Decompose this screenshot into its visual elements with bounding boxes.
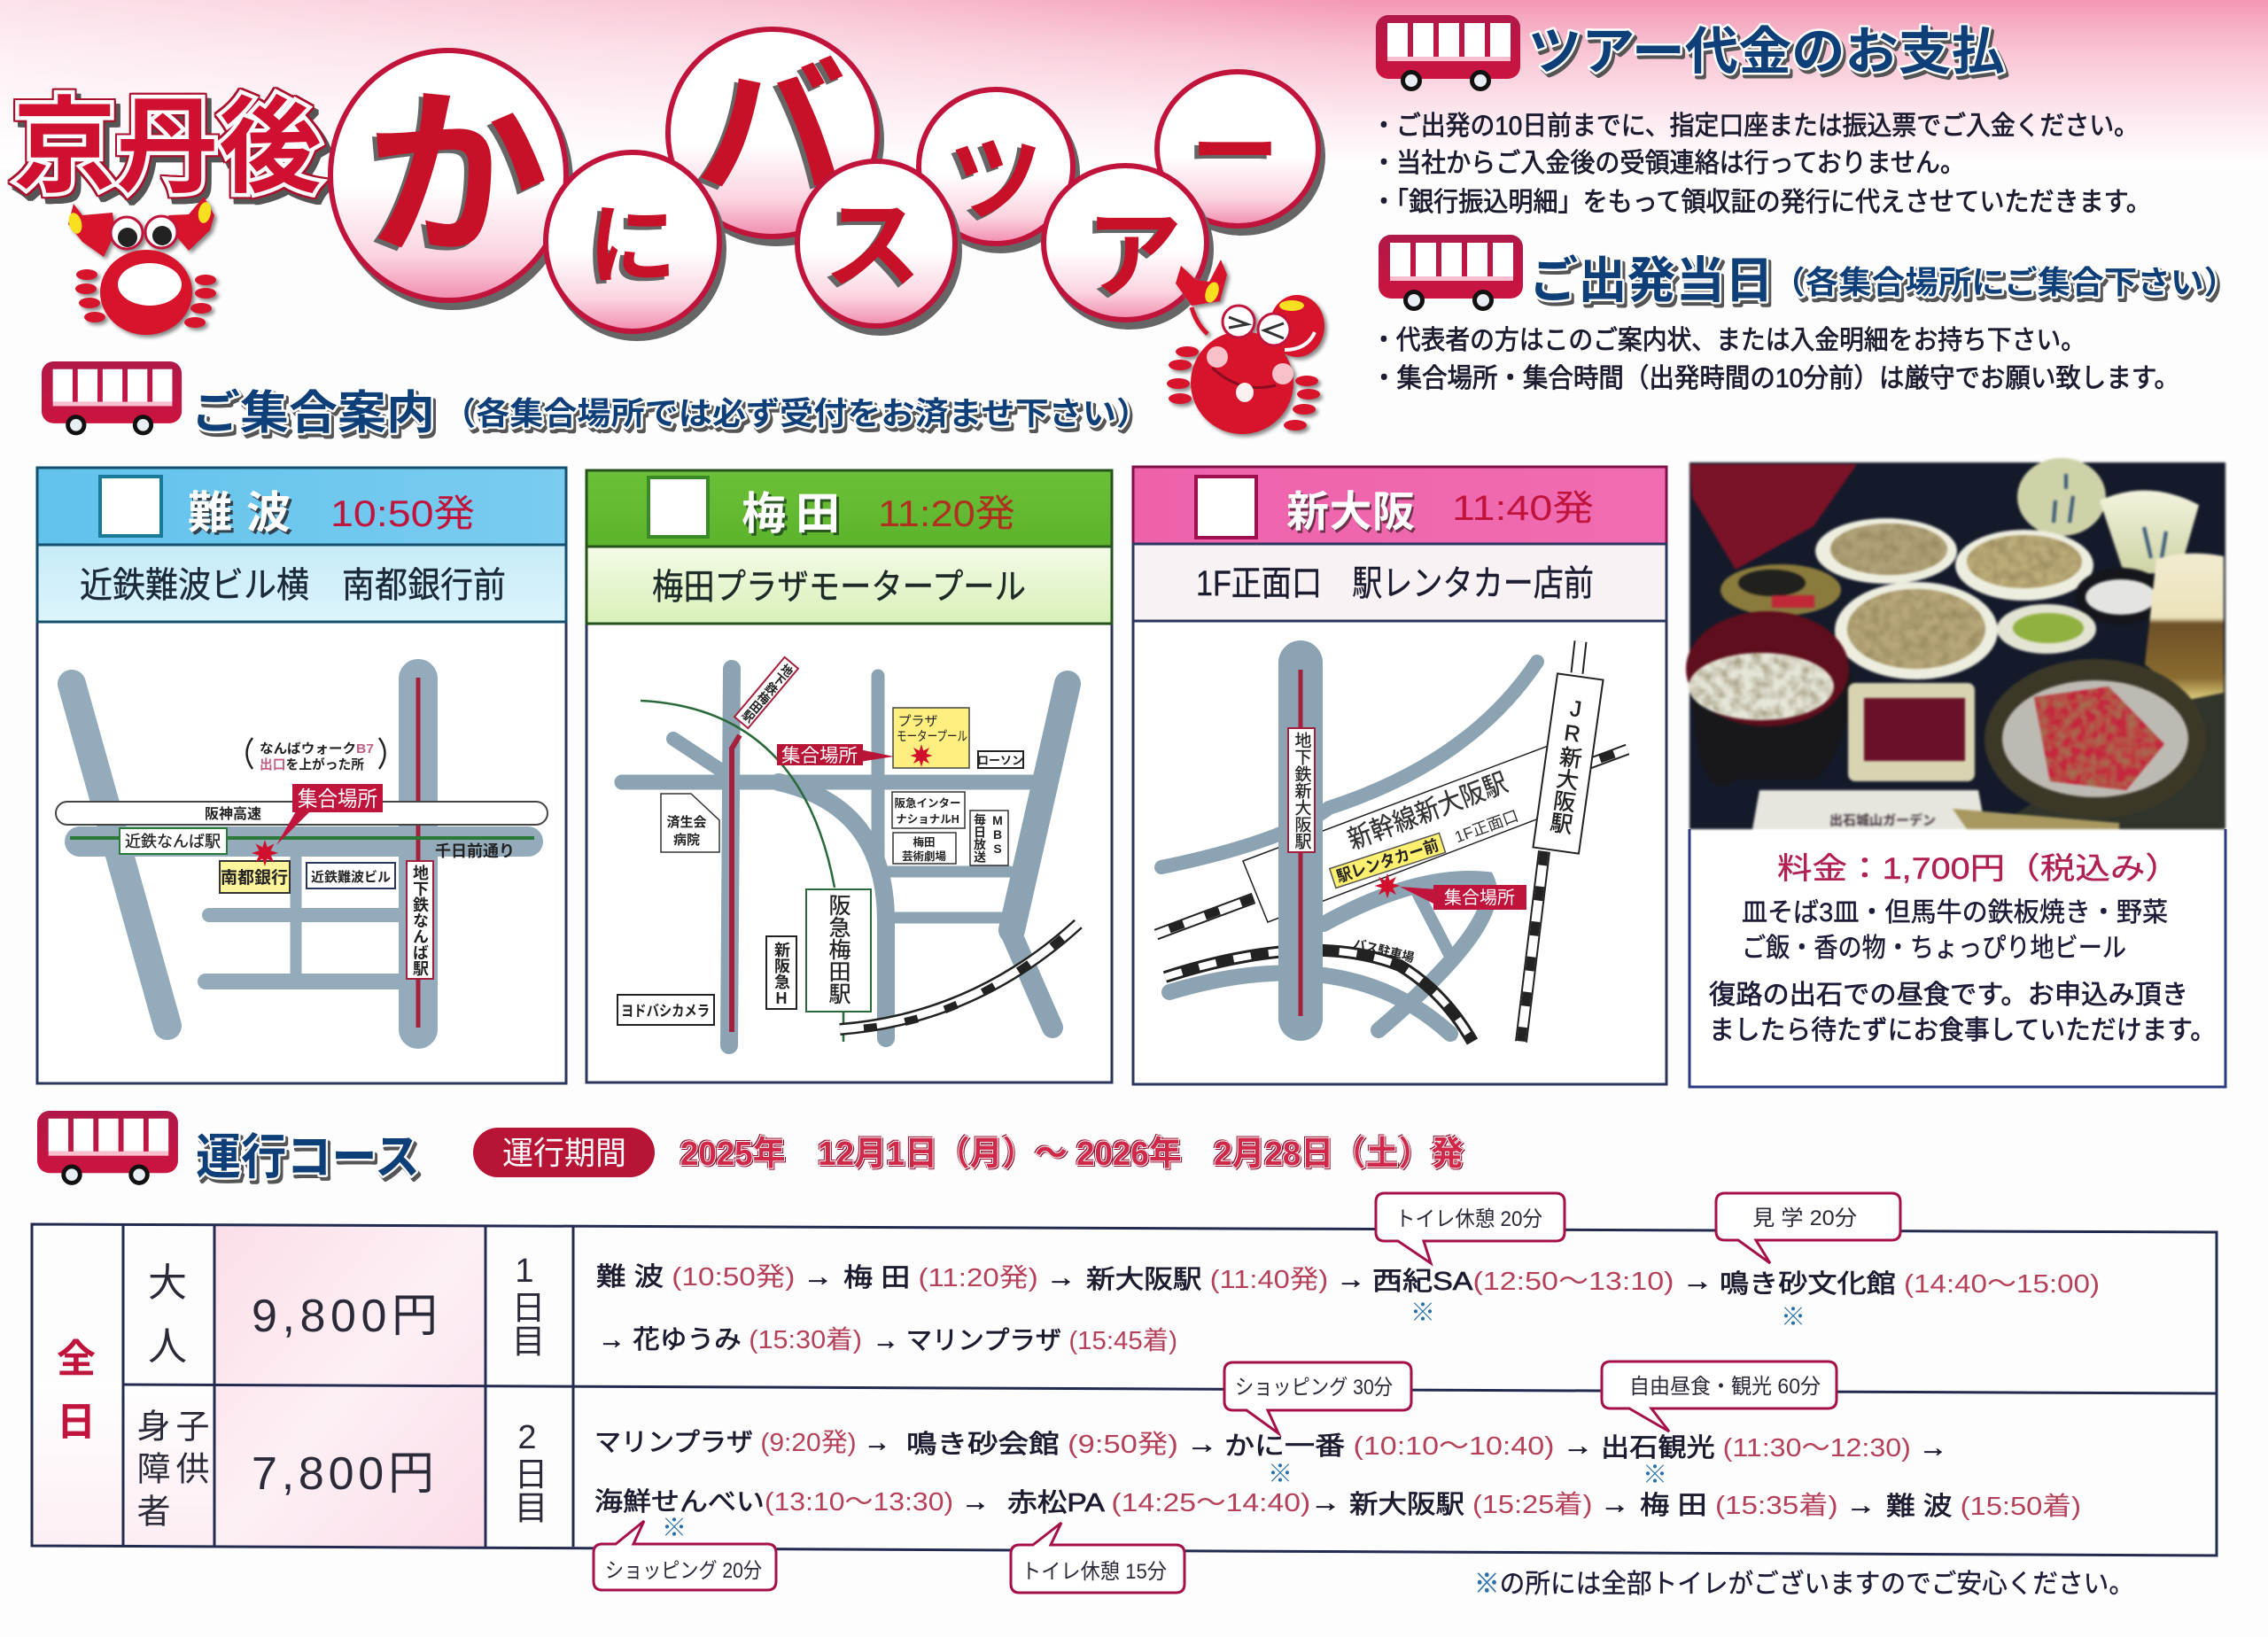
heading: ご出発当日 [1379, 235, 2237, 311]
label: プラザモータープール [893, 708, 969, 768]
row label: 子供 身障者: 子供 [170, 1408, 209, 1493]
label: 新阪急H [766, 936, 796, 1009]
panel subheading: 1F正面口 駅レンタカー店前 [1133, 544, 1666, 621]
heading: 運行コース: 運行コース [196, 1129, 420, 1184]
label: 阪急梅田駅 [806, 889, 871, 1012]
title circle ス [797, 161, 955, 326]
heading: ツアー代金のお支払 [1376, 15, 2005, 91]
route: day 1 line 2: → 花ゆうみ (15:30着) [598, 1325, 862, 1354]
price: 7,800円: 7,800円 [252, 1448, 434, 1500]
map: 難波 [56, 678, 548, 1029]
price: 9,800円: 9,800円 [252, 1291, 438, 1342]
icon: star [910, 744, 933, 767]
icon: left crab mascot [66, 197, 216, 335]
panel subheading: 梅田プラザモータープール [586, 547, 1112, 624]
label: 梅田芸術劇場 [893, 833, 956, 864]
badge: 運行期間 [473, 1128, 655, 1177]
label: ヨドバシカメラ [617, 995, 714, 1025]
callout: 集合場所 [1400, 885, 1526, 910]
row label: 大人 [148, 1261, 187, 1369]
title circle ー: ー [1191, 103, 1279, 202]
title circle か [330, 50, 566, 300]
menu description: ご飯・香の物・ちょっぴり地ビール [1742, 934, 2126, 963]
label: プラザモータープール: プラザ [897, 714, 938, 729]
label: 地下鉄なんば駅 [407, 861, 433, 979]
route: day 2 line 1 [594, 1428, 1947, 1462]
title circle ツ [919, 89, 1073, 244]
label: 新幹線新大阪駅: 新幹線新大阪駅 [1344, 768, 1511, 856]
label: exit note: 出口を上がった所 [260, 756, 364, 772]
label: 阪急インターナショナルH: ナショナルH [896, 813, 959, 826]
title circle か: か [367, 75, 548, 278]
lunch note: 復路の出石での昼食です。お申込み頂き [1709, 981, 2188, 1010]
label: 地下鉄新大阪駅: 地下鉄新大阪駅 [1292, 732, 1311, 850]
label: 毎日放送MBS [970, 811, 1008, 865]
route: day 2 line 1: 鳴き砂会館 (9:50発) → [906, 1430, 1217, 1459]
menu description [1742, 898, 2168, 963]
callout: 集合場所 [777, 744, 894, 766]
route: day 1 line 2: → マリンプラザ (15:45着) [873, 1326, 1177, 1355]
toilet marks: ※ [1410, 1299, 1435, 1326]
label: 済生会病院 [661, 794, 719, 852]
rice bowl [1691, 656, 1853, 786]
label: プラザモータープール: モータープール [897, 729, 967, 744]
panel header: 難波 10:50発: 10:50発 [330, 493, 475, 534]
category: 全日 [57, 1338, 96, 1444]
label: 新阪急H: 新阪急H [773, 942, 790, 1007]
route: day 1 line 1 [596, 1262, 2100, 1299]
row label: 子供 身障者 [131, 1408, 209, 1536]
small white dish [2075, 568, 2167, 625]
heading: ご集合案内: （各集合場所では必ず受付をお済ませ下さい） [442, 395, 1150, 431]
row label: 大人: 人 [148, 1325, 187, 1369]
title circle バ [668, 29, 877, 237]
panel subheading: 1F正面口 駅レンタカー店前: 1F正面口 駅レンタカー店前 [1196, 564, 1594, 603]
price: 料金 1,700円: 料金：1,700円（税込み） [1777, 852, 2180, 886]
icon: bus [37, 1111, 178, 1185]
text block: departure day notes [1371, 326, 2179, 393]
text block: payment notes: ・ご出発の10日前までに、指定口座または振込票でご入金ください。 [1371, 112, 2139, 141]
text block: payment notes: ・「銀行振込明細」をもって領収証の発行に代えさせていただきます。 [1371, 188, 2151, 217]
label: JR新大阪駅: JR新大阪駅 [1546, 695, 1590, 835]
label: 梅田芸術劇場: 梅田 [913, 835, 936, 849]
soba plates [1815, 518, 1957, 584]
callout: 集合場所 [276, 784, 383, 845]
photo: soba lunch set: 出石城山ガーデン [1829, 812, 1936, 828]
table: course schedule and fares [32, 1224, 2217, 1556]
toilet marks [662, 1299, 1806, 1541]
route: day 1 line 1: 梅 田 (11:20発) → [843, 1263, 1076, 1292]
heading: ご集合案内: ご集合案内 [191, 388, 435, 439]
panel: 難波 [37, 468, 566, 1083]
panel subheading: 近鉄難波ビル横 南都銀行前: 近鉄難波ビル横 南都銀行前 [80, 566, 506, 605]
text block: payment notes [1371, 112, 2151, 217]
heading: ご集合案内 [42, 361, 1150, 439]
panel: 新大阪 [1133, 467, 1666, 1084]
route: day 2 line 2: 難 波 (15:50着) [1886, 1492, 2081, 1521]
label: 南都銀行 [220, 861, 290, 893]
title: 京丹後かにバスツアー [13, 29, 1318, 331]
panel header: 難波 10:50発: 難 波 [188, 488, 291, 538]
title circle ー [1157, 72, 1318, 226]
day: 1日目: 1日目 [506, 1253, 543, 1357]
map: 梅田 [617, 657, 1078, 1045]
callout: ショッピング 20分 [594, 1521, 776, 1590]
lunch note: ましたら待たずにお食事していただけます。 [1709, 1016, 2216, 1045]
label: exit note [246, 738, 384, 772]
callout: ショッピング 30分 [1224, 1362, 1411, 1433]
row label: 子供 身障者: 身障者 [131, 1408, 169, 1536]
toilet marks: ※ [662, 1514, 687, 1541]
panel header: 難波 10:50発 [37, 468, 566, 545]
footnote: ※の所には全部トイレがございますのでご安心ください。 [1474, 1570, 2134, 1599]
label: 千日前通り: 千日前通り [435, 842, 515, 860]
panel: lunch offer [1686, 458, 2225, 1087]
heading: 運行コース [37, 1111, 420, 1185]
label: 地下鉄新大阪駅 [1288, 728, 1315, 852]
panel: 梅田 [586, 470, 1112, 1082]
callout: トイレ休憩 15分: トイレ休憩 15分 [1021, 1560, 1167, 1584]
route: day 2 line 2: 赤松PA (14:25～14:40) → [1007, 1488, 1340, 1517]
menu description: 皿そば3皿・但馬牛の鉄板焼き・野菜 [1742, 898, 2168, 927]
route: day 2 line 2 [594, 1487, 2081, 1521]
category: 全日: 日 [57, 1400, 96, 1444]
callout: トイレ休憩 20分 [1376, 1193, 1565, 1263]
text block: departure day notes: ・集合場所・集合時間（出発時間の10分前）は厳守でお願い致します。 [1371, 364, 2179, 393]
route: day 2 line 2: 新大阪駅 (15:25着) → [1349, 1490, 1629, 1519]
icon: bus [1379, 235, 1523, 311]
icon: bus [42, 361, 182, 435]
lunch note [1709, 981, 2216, 1045]
label: 近鉄難波ビル [307, 863, 395, 888]
callout: 見学 20分: 見 学 20分 [1752, 1206, 1857, 1230]
callout: 集合場所: 集合場所 [1444, 888, 1515, 908]
route: day 2 line 2: 海鮮せんべい (13:10～13:30) → [594, 1487, 990, 1517]
label: バス駐車場: バス駐車場 [1352, 936, 1416, 965]
label: 南都銀行: 南都銀行 [221, 868, 288, 888]
label: 1F正面口: 1F正面口 [1452, 807, 1521, 846]
cup top [2017, 458, 2106, 536]
text block: payment notes: ・当社からご入金後の受領連絡は行っておりません。 [1371, 149, 1965, 178]
callout: 自由昼食・観光 60分 [1602, 1362, 1837, 1431]
text block: departure day notes: ・代表者の方はこのご案内状、または入金明細をお持ち下さい。 [1371, 326, 2085, 355]
label: 梅田芸術劇場: 芸術劇場 [902, 850, 946, 863]
table shading [32, 1225, 485, 1547]
panel subheading: 梅田プラザモータープール: 梅田プラザモータープール [652, 568, 1026, 607]
operating period: 2025年 12月1日（月）～ 2026年 2月28日（土）発 [680, 1136, 1464, 1173]
title circle ス: ス [824, 192, 921, 301]
label: JR新大阪駅 [1533, 673, 1604, 854]
railway lines [1156, 641, 1627, 1042]
label: 近鉄難波ビル: 近鉄難波ビル [311, 869, 391, 885]
beer [2145, 554, 2224, 700]
panel subheading: 近鉄難波ビル横 南都銀行前 [37, 545, 566, 622]
meat dish [1984, 659, 2206, 818]
label: 済生会病院: 病院 [673, 833, 700, 848]
railway line [840, 924, 1078, 1029]
Shinkansen building [1243, 745, 1550, 922]
label: 地下鉄梅田駅: 地下鉄梅田駅 [738, 660, 796, 725]
category: 全日: 全 [57, 1338, 96, 1381]
icon: right crab mascot [1167, 260, 1324, 434]
label: 地下鉄なんば駅: 地下鉄なんば駅 [411, 865, 429, 977]
route: day 2 line 1: 出石観光 (11:30～12:30) → [1601, 1433, 1947, 1462]
callout: 見学 20分 [1716, 1193, 1900, 1263]
panel header: 新大阪 11:40発: 新大阪 [1286, 489, 1415, 536]
title circle バ: バ [695, 47, 846, 215]
photo: soba lunch set [1686, 458, 2225, 829]
panel header: 新大阪 11:40発 [1133, 467, 1666, 544]
row label: 大人: 大 [148, 1261, 187, 1305]
label: 阪神高速 [56, 802, 548, 825]
panel header: 梅田 11:20発: 11:20発 [878, 493, 1015, 534]
route: day 1 line 1: 難 波 (10:50発) → [596, 1262, 833, 1292]
badge: 運行期間: 運行期間 [502, 1135, 626, 1171]
route: day 1 line 1: 鳴き砂文化館 (14:40～15:00) [1720, 1269, 2100, 1299]
label: 阪急インターナショナルH [892, 792, 965, 828]
icon: star [1375, 873, 1400, 898]
title circle に [546, 152, 719, 331]
toilet marks: ※ [1643, 1461, 1667, 1488]
label: 阪急インターナショナルH: 阪急インター [894, 796, 961, 810]
title circle ツ: ツ [949, 129, 1043, 233]
callout: 集合場所: 集合場所 [781, 746, 858, 766]
green dish [1997, 604, 2096, 654]
callout: トイレ休憩 20分: トイレ休憩 20分 [1395, 1207, 1542, 1231]
callout: ショッピング 30分: ショッピング 30分 [1235, 1376, 1393, 1400]
label: ヨドバシカメラ: ヨドバシカメラ [621, 1003, 710, 1020]
route: day 2 line 2: 梅 田 (15:35着) → [1640, 1491, 1876, 1520]
title circle ア [1044, 166, 1207, 320]
label: 近鉄なんば駅 [120, 828, 227, 854]
title circle に: に [588, 197, 677, 296]
route: day 1 line 2 [598, 1325, 1177, 1355]
route: day 2 line 1: かに一番 (10:10～10:40) → [1224, 1432, 1593, 1461]
toilet marks: ※ [1781, 1303, 1806, 1331]
toilet marks: ※ [1268, 1460, 1293, 1487]
route: day 1 line 1: 新大阪駅 (11:40発) → [1086, 1265, 1365, 1294]
callout: 自由昼食・観光 60分: 自由昼食・観光 60分 [1629, 1375, 1821, 1399]
operating period [473, 1128, 1464, 1177]
callout: トイレ休憩 15分 [1011, 1523, 1184, 1593]
icon: star [252, 840, 278, 866]
callout: 集合場所: 集合場所 [298, 787, 377, 811]
label: exit note: なんばウォーク B7 [260, 741, 374, 756]
label: 毎日放送MBS: MBS [990, 813, 1005, 856]
heading: ご出発当日: （各集合場所にご集合下さい） [1772, 264, 2237, 300]
panel header: 梅田 11:20発: 梅 田 [742, 489, 840, 539]
dipping box [1848, 683, 1975, 781]
map: 新大阪 [1156, 641, 1627, 1042]
label: 阪急梅田駅: 阪急梅田駅 [826, 894, 850, 1005]
menu card [1752, 790, 1985, 829]
panel header: 梅田 11:20発 [586, 470, 1112, 547]
label: 毎日放送MBS: 毎日放送 [973, 813, 987, 863]
heading: ご出発当日: ご出発当日 [1529, 252, 1774, 308]
icon: bus [1376, 15, 1520, 91]
title prefix 京丹後: 京丹後 [13, 89, 322, 206]
pickles dish [1720, 564, 1841, 616]
label: 近鉄なんば駅: 近鉄なんば駅 [125, 833, 221, 850]
day: 2日目: 2日目 [509, 1419, 546, 1524]
label: 駅レンタカー前: 駅レンタカー前 [1334, 836, 1441, 886]
heading: ツアー代金のお支払: ツアー代金のお支払 [1528, 23, 2005, 81]
label: ローソン: ローソン [977, 754, 1023, 767]
label: 済生会病院: 済生会 [666, 815, 707, 830]
title circle ア: ア [1086, 202, 1182, 309]
route: day 1 line 1: 西紀SA (12:50～13:10) → [1372, 1267, 1713, 1296]
panel header: 新大阪 11:40発: 11:40発 [1452, 489, 1594, 528]
callout: ショッピング 20分: ショッピング 20分 [605, 1559, 762, 1583]
cup right [2100, 491, 2199, 574]
route: day 2 line 1: マリンプラザ (9:20発) → [594, 1428, 890, 1457]
label: 阪神高速: 阪神高速 [205, 805, 261, 822]
